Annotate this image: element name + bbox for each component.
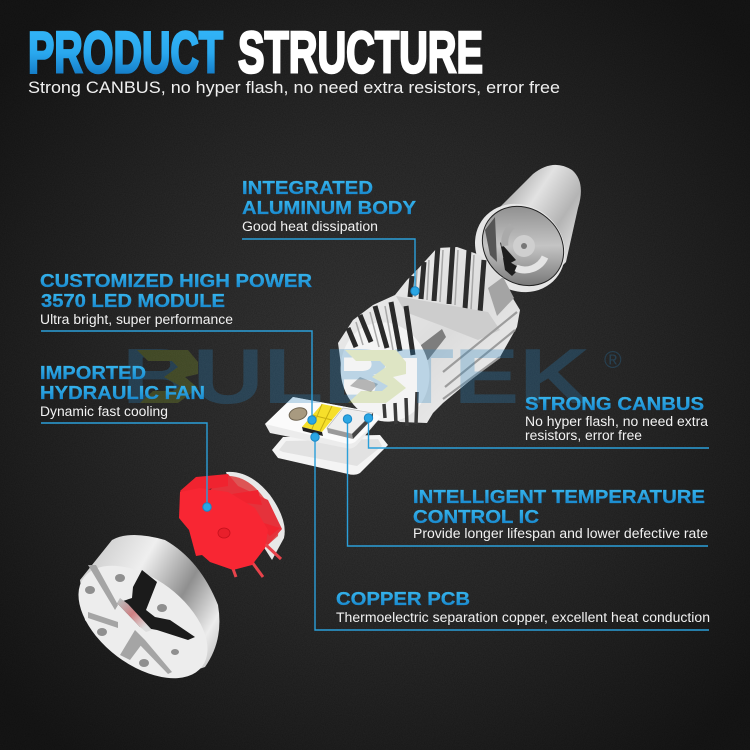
- callout: integrated aluminum body: ALUMINUM BODY: [242, 197, 417, 218]
- callout: temperature control IC: Provide longer lifespan and lower defective rate: [413, 526, 708, 541]
- callout: hydraulic fan: IMPORTED: [40, 362, 146, 383]
- callout: integrated aluminum body: INTEGRATED: [242, 177, 373, 198]
- title: PRODUCT: [28, 20, 223, 86]
- callout: hydraulic fan: HYDRAULIC FAN: [40, 382, 205, 403]
- watermark: ®: [604, 347, 622, 374]
- yellow LED: [302, 404, 342, 432]
- callout: strong canbus: resistors, error free: [525, 428, 642, 443]
- icon: LED module plates: [265, 397, 388, 475]
- front fins: [348, 302, 413, 355]
- callout: hydraulic fan: [40, 362, 211, 511]
- subtitle: Strong CANBUS, no hyper flash, no need extra resistors, error free: [28, 78, 560, 97]
- front circular end: [330, 312, 440, 432]
- icon: bulb base cap: [457, 165, 583, 310]
- callout: LED module: CUSTOMIZED HIGH POWER: [40, 270, 313, 291]
- side ribs: [443, 312, 517, 399]
- callout: hydraulic fan: Dynamic fast cooling: [40, 404, 168, 419]
- icon: red hydraulic fan: [179, 472, 285, 577]
- IC chip: [327, 408, 373, 434]
- callout: integrated aluminum body: Good heat dissipation: [242, 219, 378, 234]
- callout: temperature control IC: CONTROL IC: [413, 506, 539, 527]
- upper plate: [265, 397, 381, 449]
- callout: integrated aluminum body: [242, 177, 419, 295]
- upper rear fins: [410, 243, 484, 313]
- callout: strong canbus: [364, 393, 709, 448]
- callout: copper pcb: Thermoelectric separation copper, excellent heat conduction: [336, 610, 710, 625]
- callout: strong canbus: No hyper flash, no need extra: [525, 414, 709, 429]
- callout: copper pcb: COPPER PCB: [336, 588, 470, 609]
- copper disc: [288, 406, 308, 422]
- callout: temperature control IC: [343, 415, 708, 546]
- callout: LED module: Ultra bright, super performance: [40, 312, 233, 327]
- callout: LED module: [40, 270, 316, 424]
- title: [28, 20, 483, 86]
- icon: aluminum heat sink body: [330, 243, 520, 432]
- callout: temperature control IC: INTELLIGENT TEMPERATURE: [413, 486, 705, 507]
- title: STRUCTURE: [238, 20, 483, 86]
- watermark: BULBTEK: [122, 332, 590, 420]
- lower plate: [272, 435, 388, 475]
- callout: strong canbus: STRONG CANBUS: [525, 393, 704, 414]
- icon: silver fan ring: [58, 535, 228, 701]
- callout: copper pcb: [311, 433, 710, 630]
- callout: LED module: 3570 LED MODULE: [41, 290, 225, 311]
